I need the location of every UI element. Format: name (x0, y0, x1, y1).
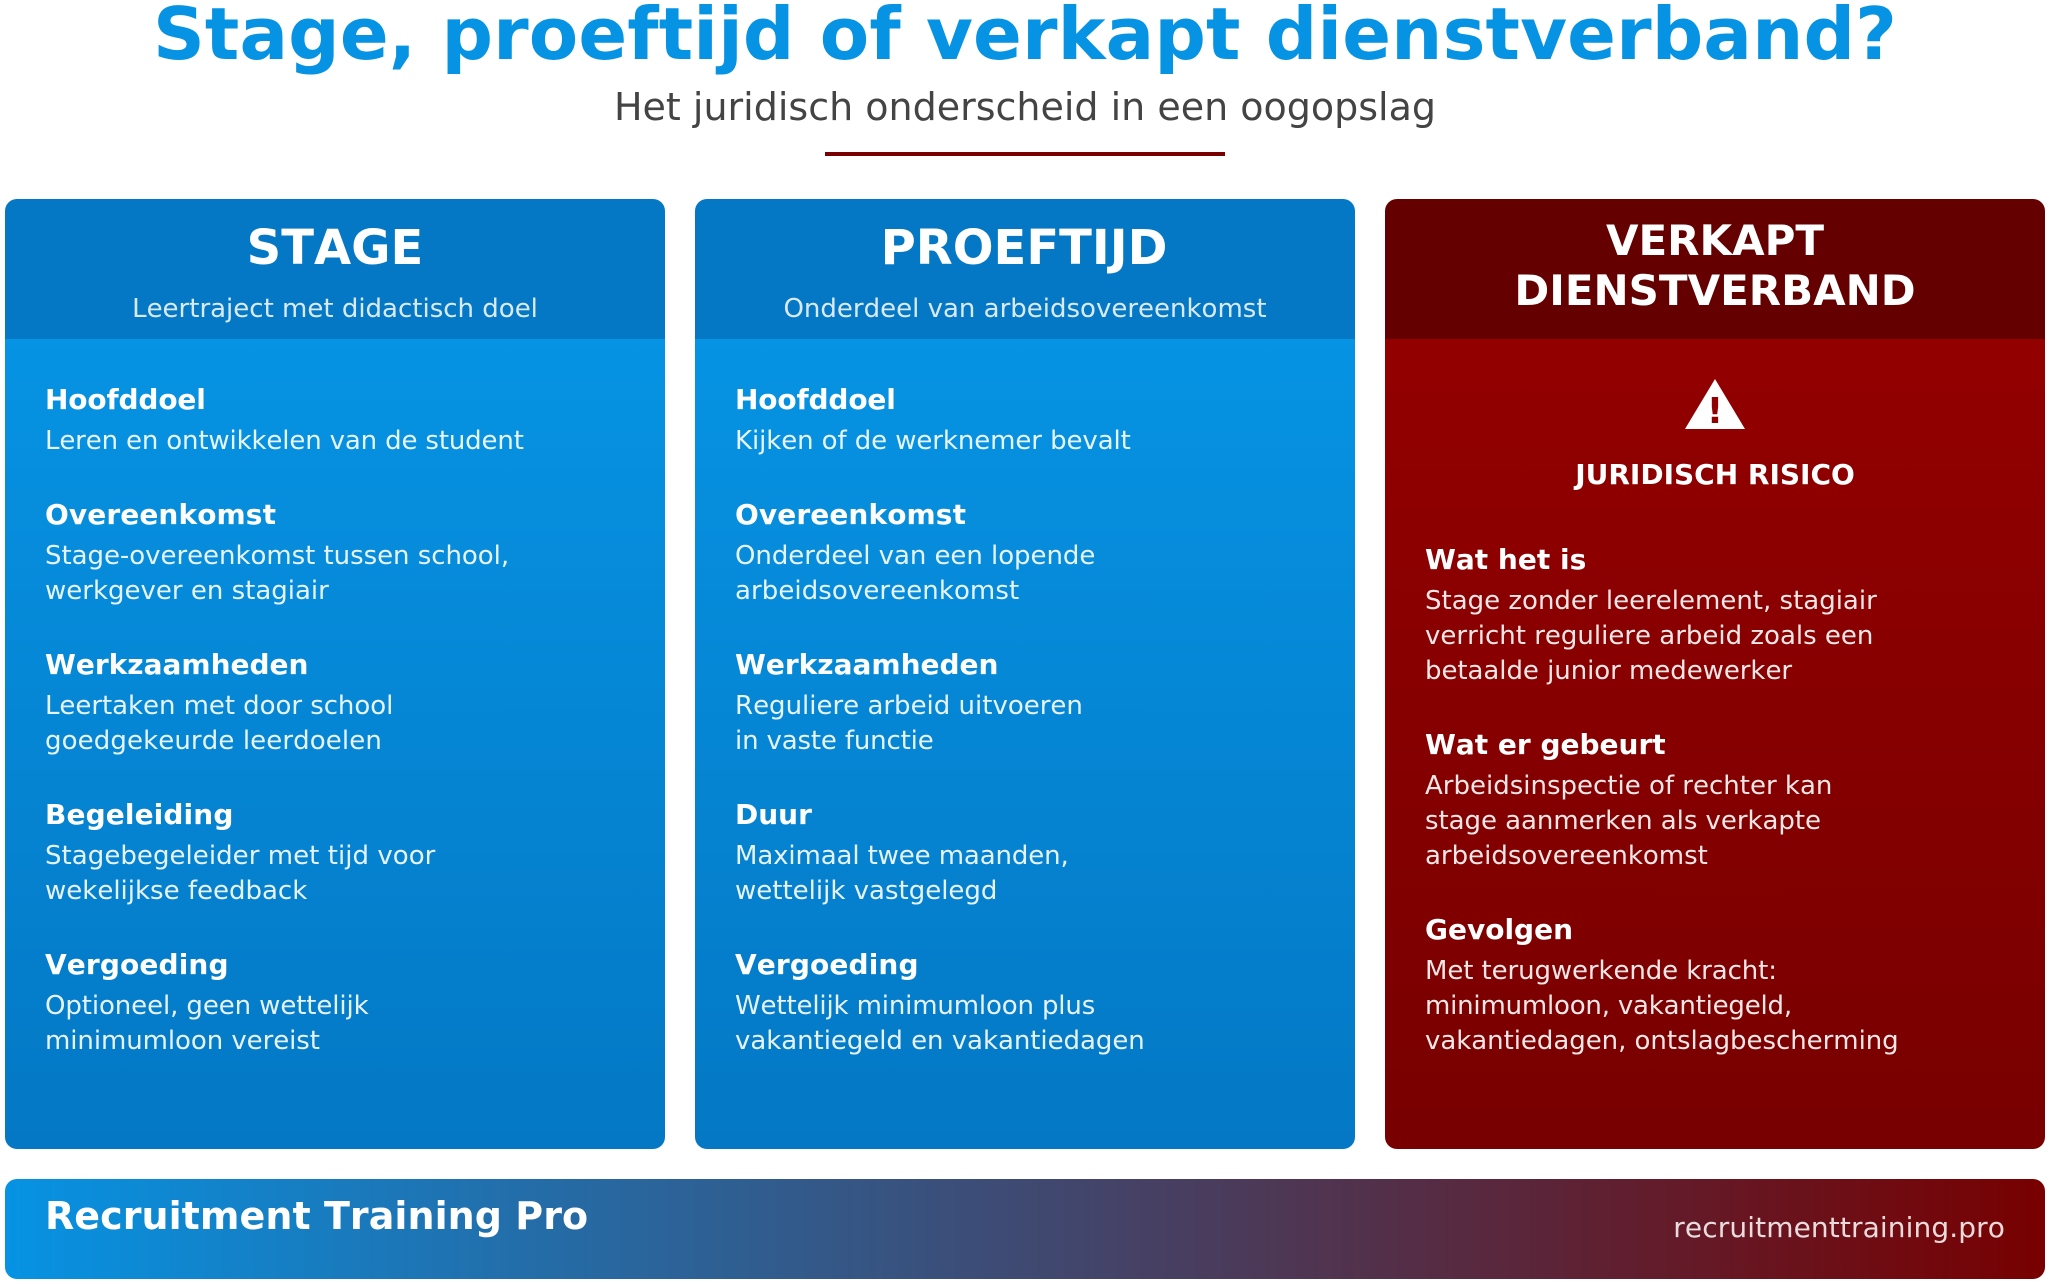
item: gevolgen (1425, 913, 1899, 1056)
item: duur (735, 798, 1069, 906)
item: wat het is: betaalde junior medewerker (1425, 656, 1792, 686)
item: wat het is: Wat het is (1425, 543, 1586, 576)
item: hoofddoel: Kijken of de werknemer bevalt (735, 426, 1131, 456)
item: wat er gebeurt (1425, 728, 1832, 871)
item: werkzaamheden (45, 648, 393, 756)
item: wat er gebeurt: stage aanmerken als verkapte (1425, 806, 1821, 836)
footer brand: Recruitment Training Pro (45, 1194, 588, 1238)
item: werkzaamheden (735, 648, 1083, 756)
item: overeenkomst: Overeenkomst (45, 498, 276, 531)
icon: warning triangle (1685, 379, 1745, 429)
item: hoofddoel (735, 383, 1131, 456)
item: overeenkomst: werkgever en stagiair (45, 576, 329, 606)
item: vergoeding: Vergoeding (45, 948, 229, 981)
subtitle: Het juridisch onderscheid in een oogopslag (614, 85, 1436, 129)
item: wat er gebeurt: arbeidsovereenkomst (1425, 841, 1708, 871)
item: overeenkomst: Overeenkomst (735, 498, 966, 531)
item: overeenkomst: arbeidsovereenkomst (735, 576, 1019, 606)
heading: verkapt dienstverband: DIENSTVERBAND (1514, 266, 1916, 315)
item: werkzaamheden: Leertaken met door school (45, 691, 393, 721)
heading: verkapt dienstverband: VERKAPT (1606, 216, 1824, 265)
item: overeenkomst (45, 498, 509, 606)
item: wat er gebeurt: Wat er gebeurt (1425, 728, 1666, 761)
item: vergoeding: minimumloon vereist (45, 1026, 320, 1056)
item: wat het is: verricht reguliere arbeid zoals een (1425, 621, 1873, 651)
item: hoofddoel: Hoofddoel (735, 383, 896, 416)
item: gevolgen: Met terugwerkende kracht: (1425, 956, 1777, 986)
label: juridisch risico: JURIDISCH RISICO (1575, 458, 1855, 491)
item: werkzaamheden: goedgekeurde leerdoelen (45, 726, 382, 756)
item: vergoeding: Optioneel, geen wettelijk (45, 991, 369, 1021)
footer url: recruitmenttraining.pro (1673, 1211, 2005, 1244)
heading: proeftijd: PROEFTIJD (881, 220, 1167, 276)
item: begeleiding: wekelijkse feedback (45, 876, 307, 906)
item: wat er gebeurt: Arbeidsinspectie of rechter kan (1425, 771, 1832, 801)
item: wat het is: Stage zonder leerelement, stagiair (1425, 586, 1877, 616)
panel header: verkapt dienstverband (1385, 199, 2045, 339)
item: duur: Maximaal twee maanden, (735, 841, 1069, 871)
item: gevolgen: vakantiedagen, ontslagbescherming (1425, 1026, 1899, 1056)
item: hoofddoel: Leren en ontwikkelen van de student (45, 426, 524, 456)
item: vergoeding: Wettelijk minimumloon plus (735, 991, 1095, 1021)
panel header: proeftijd (695, 199, 1355, 339)
item: hoofddoel: Hoofddoel (45, 383, 206, 416)
item: werkzaamheden: in vaste functie (735, 726, 934, 756)
panel: proeftijd (695, 199, 1355, 1149)
item: werkzaamheden: Werkzaamheden (45, 648, 308, 681)
item: overeenkomst: Onderdeel van een lopende (735, 541, 1095, 571)
item: wat het is (1425, 543, 1877, 686)
panel body: proeftijd (695, 339, 1355, 1149)
divider (825, 152, 1225, 156)
footer band (5, 1179, 2045, 1279)
item: gevolgen: minimumloon, vakantiegeld, (1425, 991, 1792, 1021)
panel: stage (5, 199, 665, 1149)
item: vergoeding (45, 948, 369, 1056)
item: overeenkomst (735, 498, 1095, 606)
item: begeleiding: Begeleiding (45, 798, 234, 831)
panel header: stage (5, 199, 665, 339)
item: vergoeding: vakantiegeld en vakantiedagen (735, 1026, 1145, 1056)
heading: verkapt dienstverband (1514, 216, 1916, 315)
item: werkzaamheden: Werkzaamheden (735, 648, 998, 681)
subheading: proeftijd: Onderdeel van arbeidsovereenkomst (783, 294, 1267, 324)
item: begeleiding (45, 798, 436, 906)
icon: exclamation mark: ! (1707, 391, 1723, 432)
panel body: verkapt dienstverband (1385, 339, 2045, 1149)
item: werkzaamheden: Reguliere arbeid uitvoeren (735, 691, 1083, 721)
panel: verkapt dienstverband (1385, 199, 2045, 1149)
item: duur: wettelijk vastgelegd (735, 876, 997, 906)
item: overeenkomst: Stage-overeenkomst tussen school, (45, 541, 509, 571)
item: vergoeding: Vergoeding (735, 948, 919, 981)
item: duur: Duur (735, 798, 812, 831)
item: hoofddoel (45, 383, 524, 456)
heading: stage: STAGE (247, 220, 423, 276)
panel body: stage (5, 339, 665, 1149)
item: vergoeding (735, 948, 1145, 1056)
item: gevolgen: Gevolgen (1425, 913, 1573, 946)
item: begeleiding: Stagebegeleider met tijd voor (45, 841, 435, 871)
subheading: stage: Leertraject met didactisch doel (132, 294, 538, 324)
